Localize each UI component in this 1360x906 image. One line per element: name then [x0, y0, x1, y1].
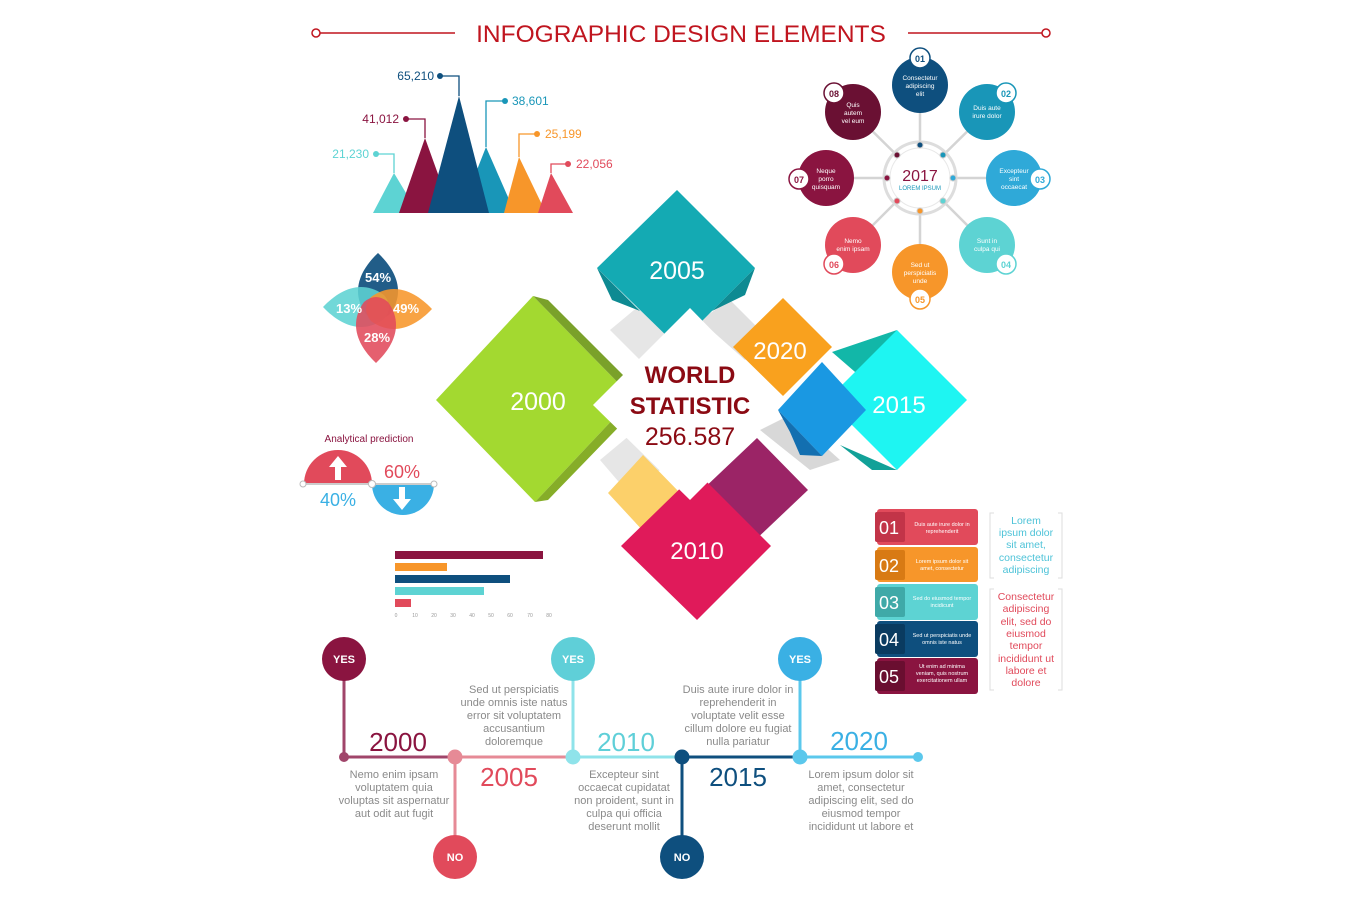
row 04 [875, 621, 978, 657]
item 08: vel eum [842, 118, 864, 125]
row 03: Sed do eiusmod tempor [913, 596, 971, 602]
circle diagram 2017: LOREM IPSUM [899, 186, 941, 192]
yes/no circles: NO [447, 852, 464, 864]
petal chart [323, 253, 432, 363]
item 01: 01 [915, 54, 925, 64]
center: world statistic: WORLD [645, 362, 735, 389]
bracket text bottom: Consectetur [998, 591, 1055, 603]
diamond purple [700, 438, 808, 545]
timeline texts: voluptas sit aspernatur [339, 795, 450, 807]
diamond yellow [608, 455, 682, 533]
bar chart: 20 [431, 613, 437, 619]
bar chart: 0 [395, 613, 398, 619]
yes/no circles: NO [674, 852, 691, 864]
row 03: 03 [879, 593, 899, 613]
item 02: 02 [1001, 89, 1011, 99]
timeline texts: reprehenderit in [699, 697, 777, 709]
timeline texts: culpa qui officia [586, 808, 663, 820]
row 03 [875, 584, 978, 620]
mountain chart: 65,210 [397, 69, 434, 83]
petal chart: 54% [365, 270, 391, 285]
item 08 [824, 83, 881, 140]
diamond blue [778, 362, 866, 456]
bracket text top: consectetur [999, 552, 1054, 564]
timeline texts: doloremque [485, 736, 543, 748]
diamond 2015: 2015 [872, 392, 926, 419]
row 02: Lorem ipsum dolor sit [916, 559, 969, 565]
timeline texts: deserunt mollit [588, 821, 660, 833]
item 04: Sunt in [977, 238, 997, 245]
bar chart: 70 [527, 613, 533, 619]
years: 2000 [369, 727, 427, 757]
item 03: occaecat [1001, 184, 1027, 191]
timeline texts: accusantium [483, 723, 545, 735]
row 05 [875, 658, 978, 694]
bar chart [395, 551, 552, 619]
row 05: exercitationem ullam [917, 678, 968, 684]
row 02: 02 [879, 556, 899, 576]
row 04: omnis iste natus [922, 640, 962, 646]
bracket text bottom: elit, sed do [1001, 616, 1052, 628]
bracket text top: ipsum dolor [999, 527, 1054, 539]
center: world statistic: STATISTIC [630, 393, 750, 420]
bracket text top: adipiscing [1003, 564, 1050, 576]
mountain chart: 25,199 [545, 127, 582, 141]
mountain chart: 21,230 [332, 147, 369, 161]
item 02: Duis aute [973, 105, 1001, 112]
bracket text bottom [990, 589, 1062, 690]
bracket text top: Lorem [1011, 515, 1041, 527]
row 05: Ut enim ad minima [919, 664, 966, 670]
numbered list [875, 509, 1062, 694]
item 04: culpa qui [974, 246, 1000, 253]
item 06: Nemo [844, 238, 862, 245]
bar chart: 40 [469, 613, 475, 619]
circle diagram 2017: 2017 [902, 168, 938, 185]
item 03: Excepteur [999, 168, 1029, 175]
item 08: Quis [846, 102, 860, 109]
item 06: 06 [829, 260, 839, 270]
analytical prediction: Analytical prediction [325, 434, 413, 445]
diamond 2010 [621, 472, 771, 620]
row 02 [875, 547, 978, 582]
item 05 [892, 244, 948, 309]
item 06: enim ipsam [836, 246, 870, 253]
bar chart: 80 [546, 613, 552, 619]
diamond 2000 [436, 296, 640, 502]
bracket text top [990, 513, 1062, 578]
years [369, 726, 888, 792]
center: world statistic [593, 308, 785, 500]
item 07: Neque [816, 168, 836, 175]
diamond 2005 [597, 190, 755, 346]
timeline texts: Lorem ipsum dolor sit [808, 769, 914, 781]
years: 2005 [480, 762, 538, 792]
timeline texts: nulla pariatur [706, 736, 770, 748]
mountain chart: 41,012 [362, 112, 399, 126]
bracket text bottom: labore et [1006, 665, 1047, 677]
bar chart: 30 [450, 613, 456, 619]
item 01: adipiscing [906, 83, 935, 90]
center: world statistic: 256.587 [645, 423, 735, 451]
mountain chart: 22,056 [576, 157, 613, 171]
item 05: unde [913, 278, 928, 285]
row 01: Duis aute irure dolor in [914, 522, 970, 528]
diamond 2010: 2010 [670, 538, 724, 565]
title: INFOGRAPHIC DESIGN ELEMENTS [476, 21, 886, 48]
petal chart: 28% [364, 330, 390, 345]
item 01: elit [916, 91, 924, 98]
item 01 [892, 48, 948, 113]
bracket text bottom: tempor [1010, 640, 1043, 652]
timeline texts: error sit voluptatem [467, 710, 561, 722]
item 06 [824, 217, 881, 274]
item 02 [959, 83, 1016, 140]
diamond 2000: 2000 [510, 388, 566, 416]
item 07: quisquam [812, 184, 840, 191]
petal chart: 13% [336, 301, 362, 316]
title [312, 21, 1050, 48]
timeline texts: adipiscing elit, sed do [808, 795, 914, 807]
timeline texts: Excepteur sint [589, 769, 659, 781]
timeline texts: unde omnis iste natus [460, 697, 568, 709]
item 08: 08 [829, 89, 839, 99]
item 03 [986, 150, 1050, 206]
timeline texts: Sed ut perspiciatis [469, 684, 559, 696]
diamond 2015 [827, 330, 967, 470]
row 05: veniam, quis nostrum [916, 671, 969, 677]
yes/no circles: YES [789, 654, 811, 666]
analytical prediction [300, 434, 437, 515]
timeline texts: Duis aute irure dolor in [683, 684, 793, 696]
timeline texts: voluptate velit esse [691, 710, 785, 722]
item 08: autem [844, 110, 862, 117]
mountain chart: 38,601 [512, 94, 549, 108]
diamond 2020 [733, 298, 832, 396]
petal chart: 49% [393, 301, 419, 316]
item 04: 04 [1001, 260, 1011, 270]
yes/no circles [322, 637, 822, 879]
item 05: perspiciatis [904, 270, 937, 277]
item 05: 05 [915, 295, 925, 305]
item 05: Sed ut [911, 262, 930, 269]
timeline texts: amet, consectetur [817, 782, 905, 794]
diamond 2005: 2005 [649, 257, 705, 285]
item 01: Consectetur [902, 75, 938, 82]
row 01: reprehenderit [926, 529, 959, 535]
item 02: irure dolor [972, 113, 1002, 120]
bar chart: 10 [412, 613, 418, 619]
item 03: sint [1009, 176, 1019, 183]
bar chart: 50 [488, 613, 494, 619]
timeline texts: aut odit aut fugit [355, 808, 433, 820]
bracket text top: sit amet, [1006, 539, 1046, 551]
timeline texts: incididunt ut labore et [809, 821, 913, 833]
analytical prediction: 60% [384, 462, 420, 482]
yes/no circles: YES [562, 654, 584, 666]
timeline texts: non proident, sunt in [574, 795, 674, 807]
bracket text bottom: eiusmod [1006, 628, 1046, 640]
timeline texts [339, 684, 914, 833]
item 07: porro [818, 176, 834, 183]
item 07: 07 [794, 175, 804, 185]
mountain chart [332, 69, 613, 213]
analytical prediction: 40% [320, 490, 356, 510]
item 03: 03 [1035, 175, 1045, 185]
diamond 2020: 2020 [753, 338, 807, 365]
row 02: amet, consectetur [920, 566, 964, 572]
item 07 [789, 150, 854, 206]
years: 2020 [830, 726, 888, 756]
bracket text bottom: dolore [1011, 677, 1041, 689]
timeline texts: eiusmod tempor [822, 808, 901, 820]
timeline texts: Nemo enim ipsam [350, 769, 438, 781]
years: 2010 [597, 727, 655, 757]
row 01: 01 [879, 518, 899, 538]
row 04: 04 [879, 630, 899, 650]
timeline [322, 637, 923, 879]
item 04 [959, 217, 1016, 274]
row 01 [875, 509, 978, 545]
central diamonds [436, 190, 967, 620]
row 05: 05 [879, 667, 899, 687]
row 04: Sed ut perspiciatis unde [913, 633, 971, 639]
timeline texts: voluptatem quia [355, 782, 434, 794]
years: 2015 [709, 762, 767, 792]
bracket text bottom: adipiscing [1003, 603, 1050, 615]
timeline texts: occaecat cupidatat [578, 782, 670, 794]
row 03: incidicunt [931, 603, 954, 609]
yes/no circles: YES [333, 654, 355, 666]
circle diagram 2017 [789, 48, 1050, 309]
bracket text bottom: incididunt ut [998, 653, 1054, 665]
timeline texts: cillum dolore eu fugiat [684, 723, 792, 735]
bar chart: 60 [507, 613, 513, 619]
